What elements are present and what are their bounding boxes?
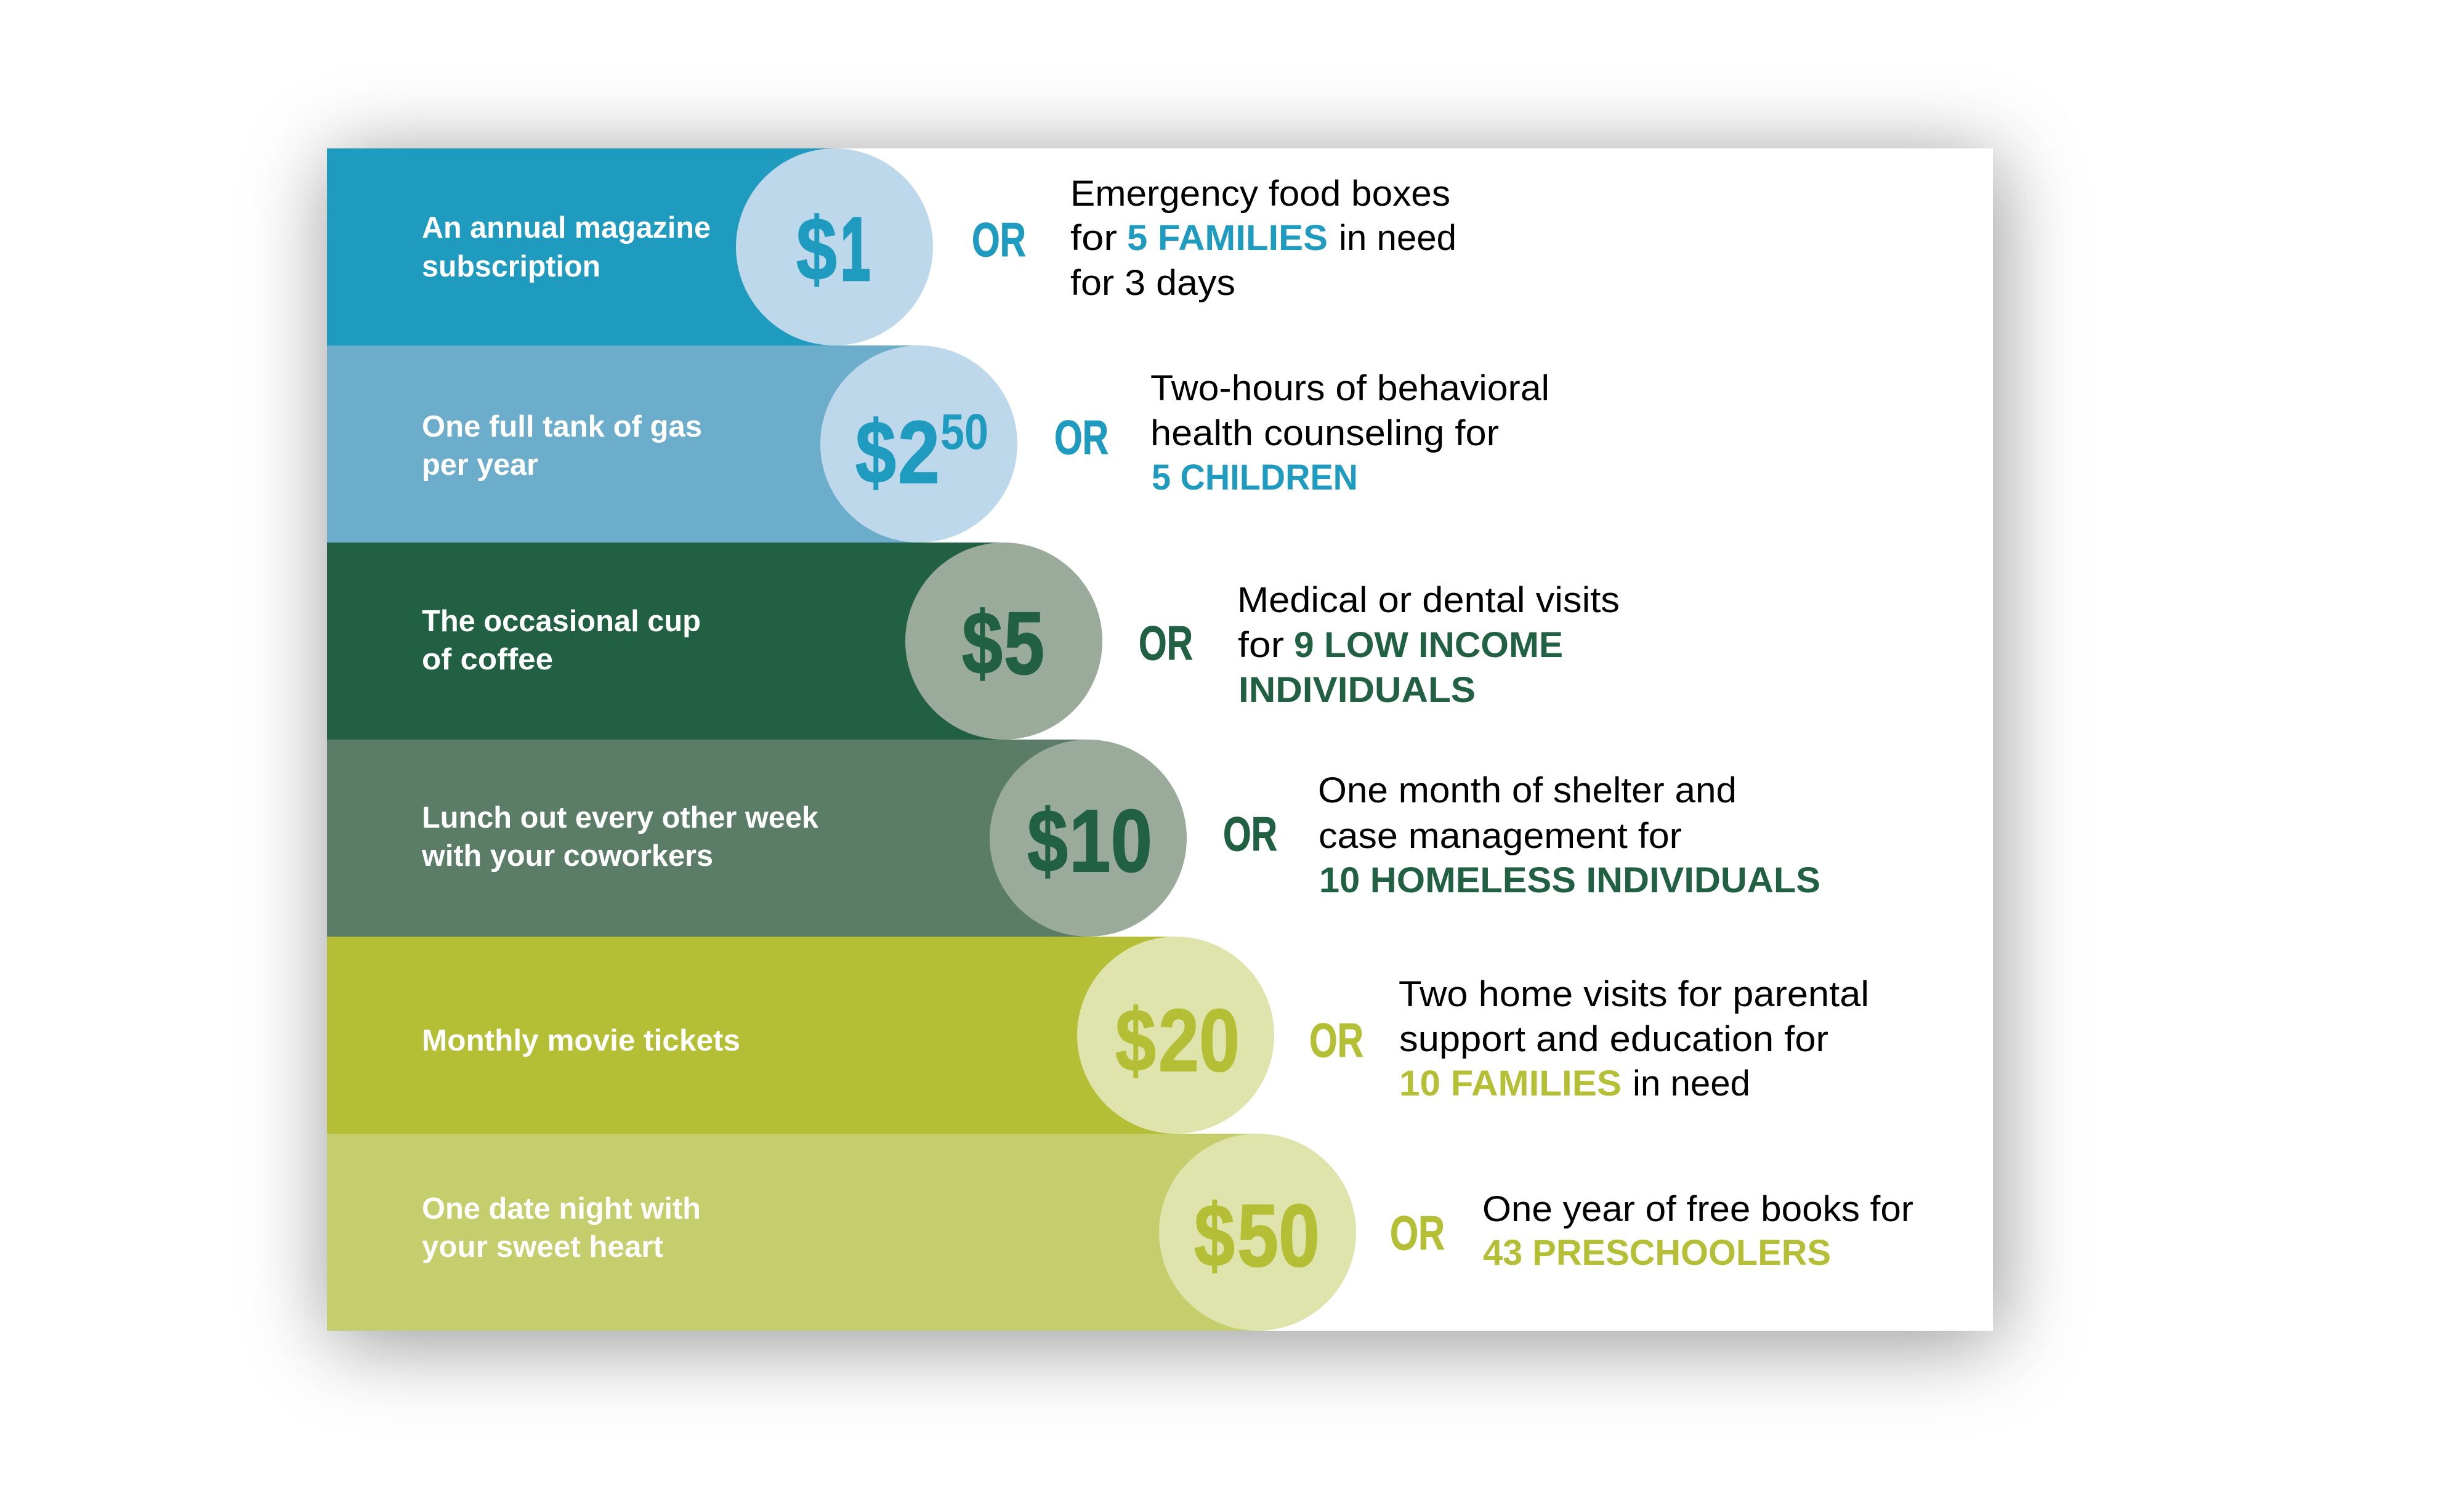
circle: $10 amount: 10 xyxy=(1069,791,1152,890)
description: medical or dental visits: Medical or dental visits xyxy=(1237,580,1620,620)
circle: $1 amount xyxy=(736,148,933,345)
OR: OR xyxy=(1223,807,1277,861)
label: full tank of gas xyxy=(422,410,702,482)
circle: $2.50 amount xyxy=(820,345,1017,543)
label: lunch out: Lunch out every other week xyxy=(422,801,819,834)
OR: OR xyxy=(1054,410,1109,464)
description: medical or dental visits xyxy=(1237,580,1620,710)
circle: $5 amount xyxy=(905,543,1102,740)
description: emergency food boxes: 5 FAMILIES xyxy=(1127,218,1328,258)
description: emergency food boxes: for 3 days xyxy=(1070,263,1235,303)
description: medical or dental visits: for xyxy=(1238,625,1284,665)
bar: blue xyxy=(327,148,834,345)
label: annual magazine: subscription xyxy=(422,250,600,283)
bar: dark green xyxy=(327,543,1004,740)
description: behavioral health counseling: Two-hours of behavioral xyxy=(1150,368,1549,408)
OR: OR xyxy=(1309,1013,1363,1067)
row: $1 magazine subscription xyxy=(327,148,1456,345)
label: occasional cup of coffee xyxy=(422,605,701,676)
circle: $5 amount: 5 xyxy=(1004,594,1044,693)
description: emergency food boxes: for xyxy=(1070,218,1117,258)
OR: OR xyxy=(1139,616,1193,670)
label: date night xyxy=(422,1192,701,1264)
circle: $2.50 amount: 50 xyxy=(940,404,988,460)
label: date night: your sweet heart xyxy=(422,1230,663,1264)
circle: $2.50 amount: 2 xyxy=(898,403,940,502)
description: shelter and case management: case management for xyxy=(1319,816,1682,856)
row: $2.50 tank of gas xyxy=(327,345,1549,543)
description: free books: 43 PRESCHOOLERS xyxy=(1483,1233,1831,1273)
circle: $5 amount: $ xyxy=(962,594,1003,693)
circle: $10 amount xyxy=(990,740,1187,937)
description: home visits: 10 FAMILIES xyxy=(1399,1063,1622,1104)
description: home visits: support and education for xyxy=(1399,1019,1828,1059)
row: $50 date night xyxy=(327,1134,1913,1331)
circle: $20 amount: $ xyxy=(1115,991,1156,1090)
label: annual magazine xyxy=(422,211,711,283)
description: free books xyxy=(1482,1189,1913,1273)
description: medical or dental visits: 9 LOW INCOME xyxy=(1294,625,1563,665)
description: free books: One year of free books for xyxy=(1482,1189,1913,1229)
circle: $20 amount: 20 xyxy=(1158,991,1240,1090)
row: $10 lunch out xyxy=(327,740,1820,937)
label: lunch out xyxy=(421,801,819,873)
label: full tank of gas: per year xyxy=(422,448,538,482)
label: date night: One date night with xyxy=(422,1192,701,1225)
bar: light blue xyxy=(327,345,919,543)
circle: $1 amount: 1 xyxy=(841,200,870,299)
label: occasional cup of coffee: The occasional cup xyxy=(422,605,701,638)
label: lunch out: with your coworkers xyxy=(421,839,713,873)
label: movie tickets: Monthly movie tickets xyxy=(422,1024,740,1057)
label: annual magazine: An annual magazine xyxy=(422,211,711,244)
label: full tank of gas: One full tank of gas xyxy=(422,410,702,443)
panel: white card with drop shadow xyxy=(327,148,1993,1331)
description: emergency food boxes xyxy=(1070,174,1456,303)
description: medical or dental visits: INDIVIDUALS xyxy=(1238,670,1476,710)
circle: $2.50 amount: $ xyxy=(855,403,896,502)
bar: olive xyxy=(327,937,1176,1134)
description: shelter and case management xyxy=(1318,770,1820,900)
description: home visits: in need xyxy=(1633,1063,1750,1104)
bar: light olive xyxy=(327,1134,1258,1331)
row: $5 cup of coffee xyxy=(327,543,1620,740)
circle: $10 amount: $ xyxy=(1027,791,1068,890)
circle: $1 amount: $ xyxy=(796,200,837,299)
label: occasional cup of coffee: of coffee xyxy=(422,643,553,676)
description: shelter and case management: 10 HOMELESS INDIVIDUALS xyxy=(1319,860,1820,900)
OR: OR xyxy=(972,212,1026,267)
circle: $50 amount xyxy=(1159,1134,1356,1331)
row: $20 movie tickets xyxy=(327,937,1869,1134)
circle: $20 amount xyxy=(1077,937,1274,1134)
description: home visits xyxy=(1399,974,1869,1104)
description: shelter and case management: One month of shelter and xyxy=(1318,770,1737,810)
circle: $50 amount: $ xyxy=(1194,1186,1235,1285)
OR: OR xyxy=(1390,1206,1445,1260)
description: emergency food boxes: Emergency food boxes xyxy=(1070,174,1450,214)
description: behavioral health counseling xyxy=(1150,368,1549,498)
description: home visits: Two home visits for parental xyxy=(1399,974,1869,1014)
description: behavioral health counseling: health counseling for xyxy=(1150,413,1499,453)
bar: muted green xyxy=(327,740,1088,937)
circle: $50 amount: 50 xyxy=(1237,1186,1320,1285)
description: emergency food boxes: in need xyxy=(1339,218,1456,258)
description: behavioral health counseling: 5 CHILDREN xyxy=(1152,458,1358,498)
